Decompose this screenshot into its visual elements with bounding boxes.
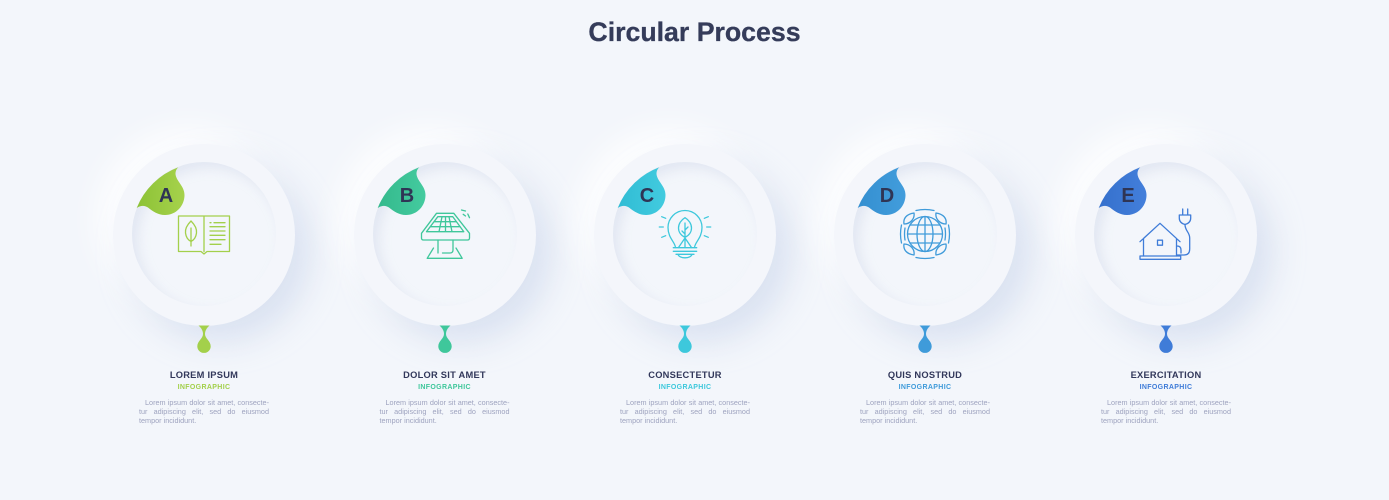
icon: solar panel <box>421 210 469 258</box>
badge C <box>618 167 666 215</box>
heading C: CONSECTETUR <box>648 370 722 380</box>
text C: Lorem ipsum dolor sit amet, consecte- <box>626 398 750 406</box>
text D: tur adipiscing elit, sed do eiusmod <box>860 407 990 416</box>
badge A <box>137 167 184 215</box>
icon: globe with leaves <box>900 210 950 258</box>
text C: tur adipiscing elit, sed do eiusmod <box>620 407 750 416</box>
drop connector B <box>438 326 451 353</box>
graphics: step C badge, icon and drop <box>618 167 712 353</box>
badge D: D <box>880 185 894 207</box>
text D: tempor incididunt. <box>860 416 917 425</box>
text B: Lorem ipsum dolor sit amet, consecte- <box>386 398 510 406</box>
heading B: DOLOR SIT AMET <box>403 370 486 380</box>
graphics: step B badge, icon and drop <box>378 167 470 353</box>
drop connector E <box>1159 326 1173 353</box>
panel: step E <box>1094 162 1280 425</box>
heading A: LOREM IPSUM <box>170 370 238 380</box>
text B: tur adipiscing elit, sed do eiusmod <box>380 407 510 416</box>
badge D <box>858 167 906 215</box>
title: Circular Process <box>588 17 801 47</box>
panel: step B <box>373 162 558 425</box>
badge E: E <box>1121 185 1135 207</box>
icon: light bulb with leaf <box>659 210 711 258</box>
icon: open book with leaf <box>178 216 230 254</box>
panel: step C <box>613 162 798 425</box>
subheading D: INFOGRAPHIC <box>899 384 951 391</box>
text E: tur adipiscing elit, sed do eiusmod <box>1101 407 1231 416</box>
graphics: step A badge, icon and drop <box>136 167 230 353</box>
text B: tempor incididunt. <box>380 416 437 425</box>
badge B: B <box>399 185 414 207</box>
text A: Lorem ipsum dolor sit amet, consecte- <box>145 398 269 406</box>
graphics: step D badge, icon and drop <box>858 167 950 353</box>
badge E <box>1099 167 1146 215</box>
text A <box>139 398 269 425</box>
subheading C: INFOGRAPHIC <box>659 384 711 391</box>
subheading E: INFOGRAPHIC <box>1140 384 1192 391</box>
text D: Lorem ipsum dolor sit amet, consecte- <box>866 398 990 406</box>
panel: step A <box>132 162 318 425</box>
text A: tempor incididunt. <box>139 416 196 425</box>
badge B <box>377 167 425 215</box>
text E: tempor incididunt. <box>1101 416 1158 425</box>
heading E: EXERCITATION <box>1131 370 1201 380</box>
badge A: A <box>159 185 173 207</box>
icon: house with plug <box>1140 209 1191 259</box>
heading D: QUIS NOSTRUD <box>888 370 962 380</box>
graphics: step E badge, icon and drop <box>1098 167 1192 353</box>
subheading B: INFOGRAPHIC <box>418 384 471 391</box>
text A: tur adipiscing elit, sed do eiusmod <box>139 407 269 416</box>
text E <box>1101 398 1231 425</box>
drop connector C <box>678 326 692 353</box>
drop connector D <box>918 326 932 353</box>
panel: step D <box>853 162 1038 425</box>
subheading A: INFOGRAPHIC <box>178 384 230 391</box>
badge C: C <box>640 185 654 207</box>
drop connector A <box>197 326 211 353</box>
text B <box>380 398 510 425</box>
text C: tempor incididunt. <box>620 416 677 425</box>
text C <box>620 398 750 425</box>
text D <box>860 398 990 425</box>
text E: Lorem ipsum dolor sit amet, consecte- <box>1107 398 1231 406</box>
